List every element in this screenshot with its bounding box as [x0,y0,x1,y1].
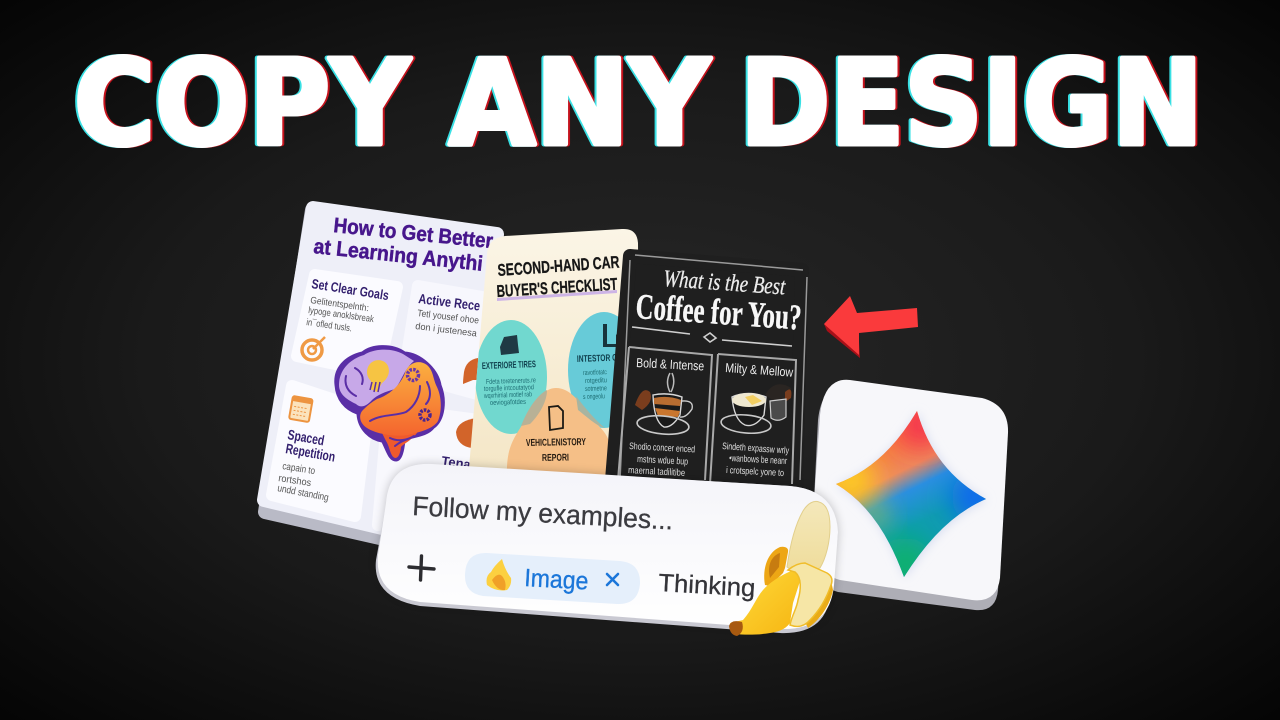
panel: milky and mellow [710,354,796,484]
icon: brain [335,346,444,461]
arrow [824,296,918,358]
main body [730,568,801,635]
panel: car checklist card: s ongeolu [583,393,605,401]
panel: car checklist card: ravotfotatc [583,369,607,377]
teal circles [475,320,547,434]
bulb [367,360,389,392]
tile: spaced repetition [272,386,368,516]
icon: calendar [289,396,313,422]
panel: prompt bar [376,464,838,633]
panel: milky and mellow: i crotspelc yone to [726,465,784,479]
panel: star tile [812,380,1008,610]
image chip: Image [524,564,589,596]
right back peel [806,576,833,628]
image chip [465,553,640,604]
panel: bold and intense: Bold & Intense [636,355,705,374]
tile: technique: Tena [441,453,473,472]
card heading: SECOND-HAND CAR [497,253,620,280]
chalk frame [620,255,807,480]
title: COPY [72,34,409,172]
ornament [632,327,792,346]
tile: active recall: Tetl yousef ohoe [417,308,480,327]
panel: car checklist card [468,229,640,480]
panel: coffee chalkboard card [612,255,807,486]
prompt text: Follow my examples... [412,491,674,536]
panel: car checklist card: torgufle intcoutatyod [484,384,534,393]
tile: active recall: Active Rece [418,291,481,314]
icon: orange badge [456,418,478,448]
card heading [496,253,620,301]
icon: plus [409,556,434,580]
panel: car checklist card: EXTERIORE TIRES [482,359,536,372]
panel: car checklist card: INTESTOR C [577,353,617,365]
flesh [787,501,830,575]
panel: milky and mellow: •wanbows be neanr [729,453,787,467]
title: DESIGN [742,34,1205,172]
title: ANY [447,34,709,172]
icon: interior [603,324,622,347]
underline [497,290,617,301]
title [72,34,1205,172]
title: COPY [76,34,413,172]
title: COPY [74,34,411,172]
card heading: at Learning Anythi [312,235,484,276]
panel: milky and mellow: Sindeth expassw wrly [722,441,790,457]
front peel [788,563,832,626]
icon: gradient star [836,411,986,577]
panel: milky and mellow: Milty & Mellow [725,360,794,380]
icon: car [500,335,519,355]
icon: close [607,574,618,585]
panel: car checklist card: wqxrhirrial motlef rab [483,391,532,400]
tile: spaced repetition: capain to [282,461,316,477]
icon: small banana [486,559,511,590]
panel: car checklist card: VEHICLENISTORY [526,437,586,449]
panel: bold and intense: maernal tadilitibe [628,465,685,479]
panel: bold and intense: Shodio concer enced [629,441,695,455]
icon: target [302,337,325,360]
card heading [312,214,494,276]
tile: active recall: don i justenesa [415,321,478,340]
tile: spaced repetition: Repetition [284,440,336,465]
icon: milky coffee [720,384,791,435]
panel: learning card [264,208,500,538]
title: ANY [449,34,711,172]
panel: car checklist card: rotgeditu [585,377,607,385]
title: DESIGN [740,34,1203,172]
tile: set clear goals: Gelitentspelnth: [310,295,370,314]
card heading: How to Get Better [332,214,494,253]
panel: car checklist card: oeviogafotdes [490,399,526,407]
icon: banana [729,501,833,636]
tile: set clear goals: lypoge anoklsbreak [308,305,375,325]
panel: bold and intense: mstns wdue bup [637,454,688,468]
panel: car checklist card: Fdeta toreteneruts.re [486,377,536,386]
back peel [764,547,788,586]
orange blob [507,388,612,480]
title: ANY [451,34,713,172]
icon: document [549,406,563,430]
panel: bold and intense [618,347,712,480]
panel: car checklist card: REPORI [542,453,569,464]
tile: active recall [404,286,500,394]
tile: set clear goals: in¯ofled tusls. [306,317,353,334]
thinking label: Thinking [658,569,756,602]
title: DESIGN [738,34,1201,172]
tile: technique [378,408,478,525]
card heading: What is the Best [663,266,787,301]
icon: speech bubble [463,358,478,384]
tile: set clear goals [297,275,397,373]
tile: spaced repetition: rortshos [278,473,312,489]
tile: spaced repetition: Spaced [286,426,326,448]
card heading: BUYER'S CHECKLIST [496,275,618,301]
tile: spaced repetition: undd standing [276,483,330,504]
panel: coffee chalkboard card: Coffee for You? [634,286,803,338]
panel: car checklist card: sotmetne [585,385,607,393]
icon: coffee cup [635,373,692,436]
tile: set clear goals: Set Clear Goals [311,276,390,303]
